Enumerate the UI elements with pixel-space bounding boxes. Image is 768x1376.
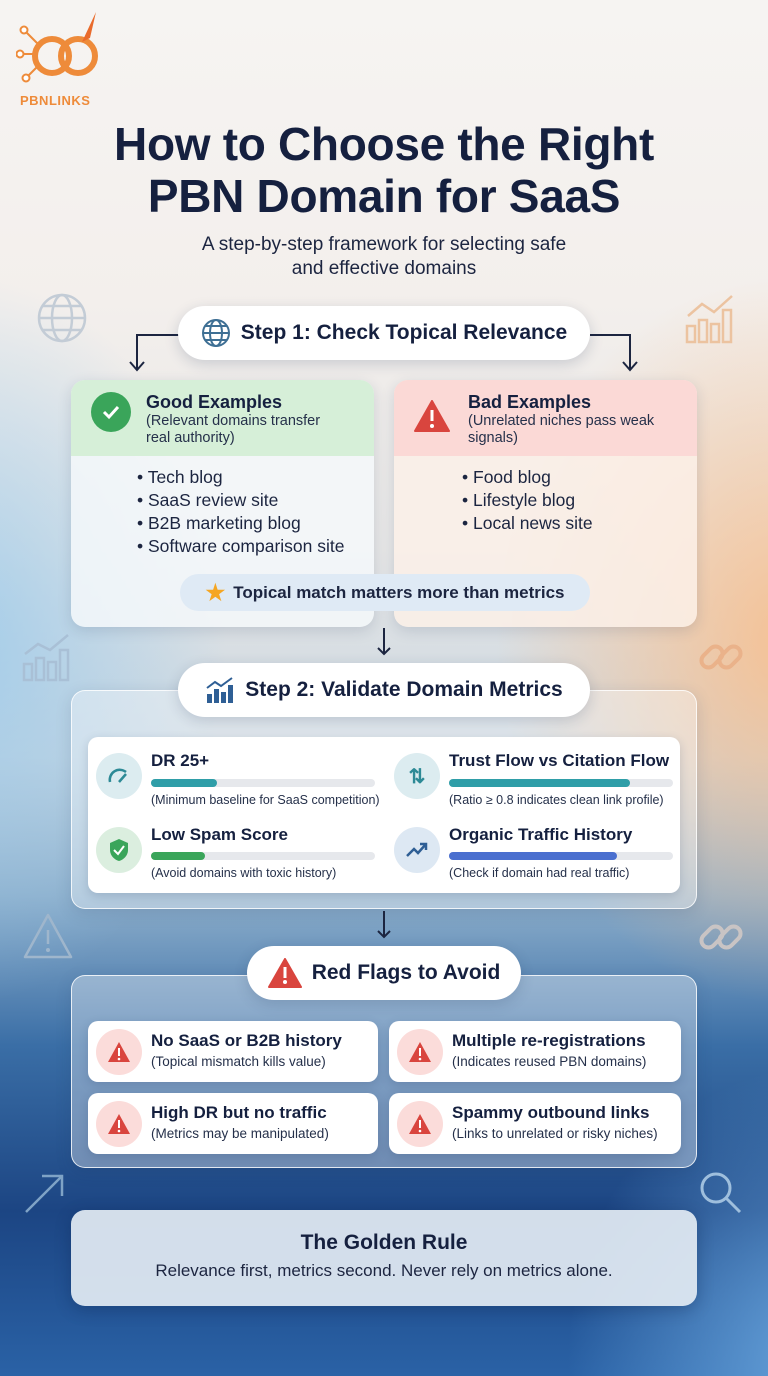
step 1 pill: Step 1: Check Topical Relevance bbox=[241, 321, 567, 344]
list: bad: Lifestyle blog bbox=[473, 490, 575, 510]
list: bad: Food blog bbox=[473, 467, 551, 487]
metrics card: Low Spam Score bbox=[151, 825, 288, 844]
metrics card: Trust Flow vs Citation Flow bbox=[449, 751, 669, 770]
list: bad bbox=[462, 467, 593, 533]
metrics card: (Avoid domains with toxic history) bbox=[151, 866, 336, 880]
icon: faded globe bbox=[38, 294, 86, 342]
list: good bbox=[138, 467, 344, 556]
flag 2 bbox=[389, 1021, 681, 1082]
list: good: B2B marketing blog bbox=[148, 513, 301, 533]
heading: bad examples bbox=[468, 392, 654, 446]
callout: topical match: Topical match matters more than metrics bbox=[233, 582, 565, 602]
golden rule: Relevance first, metrics second. Never rely on metrics alone. bbox=[155, 1261, 613, 1280]
heading: bad examples: Bad Examples bbox=[468, 392, 591, 412]
step 2 pill bbox=[178, 663, 590, 717]
faded icons left/right bbox=[22, 634, 70, 682]
heading: good examples: real authority) bbox=[146, 430, 235, 446]
icon: faded chart bbox=[686, 295, 733, 344]
logo: PBNLINKS bbox=[16, 12, 98, 108]
heading: good examples: Good Examples bbox=[146, 392, 282, 412]
flag 4: (Links to unrelated or risky niches) bbox=[452, 1126, 658, 1141]
flag 2: Multiple re-registrations bbox=[452, 1031, 646, 1050]
list: good: Tech blog bbox=[148, 467, 223, 487]
panel: good examples bbox=[71, 380, 374, 627]
list: good: Software comparison site bbox=[148, 536, 344, 556]
step 2 pill: Step 2: Validate Domain Metrics bbox=[245, 678, 563, 701]
heading: good examples: (Relevant domains transfer bbox=[146, 413, 320, 429]
title: PBN Domain for SaaS bbox=[148, 170, 620, 222]
red flags pill bbox=[247, 946, 521, 1000]
golden rule: The Golden Rule bbox=[301, 1231, 467, 1254]
list: good: SaaS review site bbox=[148, 490, 278, 510]
heading: good examples bbox=[146, 392, 320, 446]
panel: step 2 metrics bbox=[71, 690, 697, 909]
metrics card: DR 25+ bbox=[151, 751, 209, 770]
subtitle: A step-by-step framework for selecting safe bbox=[202, 234, 566, 255]
metric: spam bbox=[96, 827, 142, 873]
metrics card: (Check if domain had real traffic) bbox=[449, 866, 629, 880]
heading: bad examples: (Unrelated niches pass weak bbox=[468, 413, 654, 429]
flag 1: (Topical mismatch kills value) bbox=[151, 1054, 326, 1069]
metric: TF vs CF: ⇅ bbox=[409, 766, 425, 788]
metric: DR bbox=[96, 753, 142, 799]
golden rule bbox=[71, 1210, 697, 1306]
step 1 pill bbox=[178, 306, 590, 360]
flag 1: No SaaS or B2B history bbox=[151, 1031, 342, 1050]
flag 1 bbox=[88, 1021, 378, 1082]
metrics card bbox=[88, 737, 680, 893]
flag 4 bbox=[389, 1093, 681, 1154]
heading: bad examples: signals) bbox=[468, 430, 518, 446]
title: How to Choose the Right bbox=[114, 118, 654, 170]
subtitle bbox=[202, 234, 566, 279]
faded icons bottom bbox=[25, 1174, 64, 1213]
subtitle: and effective domains bbox=[292, 258, 476, 279]
flag 4: Spammy outbound links bbox=[452, 1103, 649, 1122]
list: bad: Local news site bbox=[473, 513, 593, 533]
flag 3: High DR but no traffic bbox=[151, 1103, 327, 1122]
icon: check bbox=[91, 392, 131, 432]
panel: red flags bbox=[71, 975, 697, 1168]
flag 2: (Indicates reused PBN domains) bbox=[452, 1054, 646, 1069]
metric: TF vs CF bbox=[394, 753, 440, 799]
logo: PBNLINKS: PBNLINKS bbox=[20, 93, 90, 108]
arrows from step 1 bbox=[129, 334, 638, 372]
flag 3: (Metrics may be manipulated) bbox=[151, 1126, 329, 1141]
callout: topical match bbox=[180, 574, 590, 611]
arrow down 2 bbox=[377, 911, 391, 938]
icon: warning bbox=[414, 400, 450, 432]
title bbox=[114, 118, 654, 222]
faded icons bbox=[24, 914, 72, 958]
panel: bad examples bbox=[394, 380, 697, 627]
metric: traffic bbox=[394, 827, 440, 873]
arrow down 1 bbox=[377, 628, 391, 656]
metrics card: (Minimum baseline for SaaS competition) bbox=[151, 793, 380, 807]
callout: topical match: ★ bbox=[205, 580, 225, 604]
metrics card: (Ratio ≥ 0.8 indicates clean link profile) bbox=[449, 793, 664, 807]
red flags pill: Red Flags to Avoid bbox=[312, 961, 500, 984]
metrics card: Organic Traffic History bbox=[449, 825, 632, 844]
flag 3 bbox=[88, 1093, 378, 1154]
